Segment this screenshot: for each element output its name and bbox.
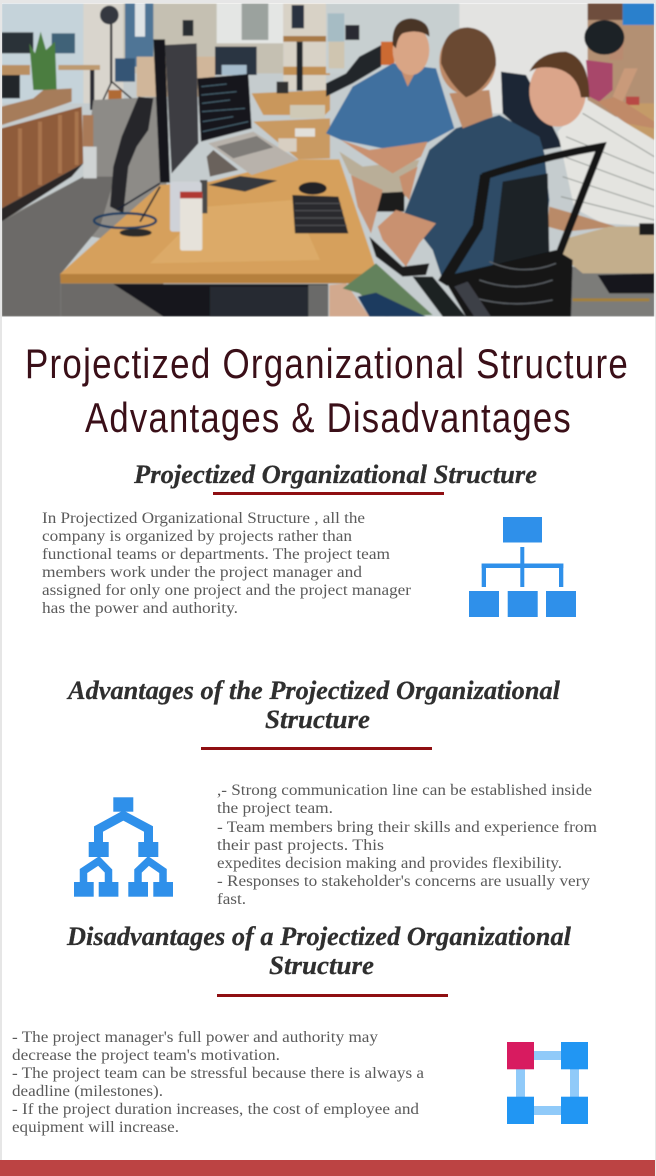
photo: team meeting at an office desk xyxy=(2,3,655,317)
text block: advantages list: their past projects. This xyxy=(217,837,384,854)
text block: advantages list: the project team. xyxy=(217,800,333,817)
text block: advantages list: - Responses to stakeholder's concerns are usually very xyxy=(217,873,590,890)
text block: definition: functional teams or departments. The project team xyxy=(42,546,390,563)
text block: disadvantages list: equipment will increase. xyxy=(12,1119,179,1136)
icon: org chart xyxy=(469,517,576,617)
text block: definition: has the power and authority. xyxy=(42,600,238,617)
text block: disadvantages list: decrease the project team's motivation. xyxy=(12,1047,280,1064)
heading: advantages: Structure xyxy=(265,705,370,734)
text block: advantages list: ,- Strong communication line can be established inside xyxy=(217,782,592,799)
icon: connected squares xyxy=(507,1042,588,1124)
text block: disadvantages list: deadline (milestones). xyxy=(12,1083,163,1100)
text block: disadvantages list xyxy=(12,1029,424,1136)
text block: definition: In Projectized Organizational Structure , all the xyxy=(42,510,365,527)
text block: definition: assigned for only one project and the project manager xyxy=(42,582,412,599)
heading: projectized organizational structure: Projectized Organizational Structure xyxy=(133,460,537,489)
text block: advantages list: - Team members bring their skills and experience from xyxy=(217,819,597,836)
icon: hierarchy tree xyxy=(74,797,173,897)
footer bar xyxy=(0,1160,655,1176)
text block: definition: company is organized by projects rather than xyxy=(42,528,352,545)
heading: disadvantages: Disadvantages of a Projectized Organizational xyxy=(66,922,572,951)
text block: disadvantages list: - If the project duration increases, the cost of employee and xyxy=(12,1101,419,1118)
heading: disadvantages xyxy=(66,922,572,980)
text block: advantages list: expedites decision making and provides flexibility. xyxy=(217,855,562,872)
heading: advantages xyxy=(66,676,561,734)
text block: definition xyxy=(42,510,412,617)
text block: advantages list xyxy=(217,782,597,908)
title xyxy=(25,340,629,441)
text block: definition: members work under the project manager and xyxy=(42,564,362,581)
heading: advantages: Advantages of the Projectized Organizational xyxy=(66,676,561,705)
text block: disadvantages list: - The project team can be stressful because there is always a xyxy=(12,1065,424,1082)
text block: advantages list: fast. xyxy=(217,891,246,908)
heading: disadvantages: Structure xyxy=(269,951,374,980)
text block: disadvantages list: - The project manager's full power and authority may xyxy=(12,1029,378,1046)
